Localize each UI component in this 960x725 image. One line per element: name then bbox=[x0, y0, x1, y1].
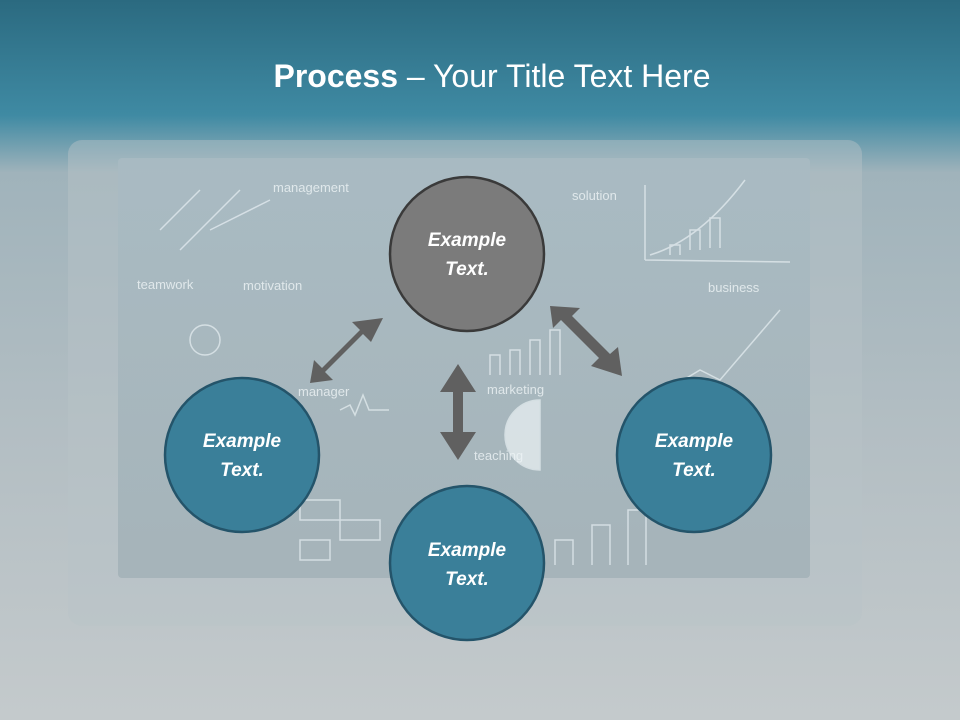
title: Process – Your Title Text Here bbox=[273, 58, 711, 94]
arrow: top to bottom bbox=[440, 364, 476, 460]
circle: left: Example bbox=[203, 431, 282, 452]
tablet: manager bbox=[298, 384, 350, 399]
arrow: top to left bbox=[310, 318, 383, 383]
arrow: top to right bbox=[550, 306, 622, 376]
tablet bbox=[68, 140, 862, 626]
circle: top bbox=[390, 177, 544, 331]
circle: left bbox=[165, 378, 319, 532]
circle: left: Text. bbox=[220, 460, 264, 481]
circle: top: Text. bbox=[445, 259, 489, 280]
tablet: teaching bbox=[474, 448, 523, 463]
tablet: management bbox=[273, 180, 349, 195]
tablet: motivation bbox=[243, 278, 302, 293]
circle: right: Text. bbox=[672, 460, 716, 481]
circle: bottom: Text. bbox=[445, 569, 489, 590]
tablet screen bbox=[118, 158, 810, 578]
circle: top: Example bbox=[428, 230, 507, 251]
circle: bottom bbox=[390, 486, 544, 640]
circle: bottom: Example bbox=[428, 540, 507, 561]
circle: right bbox=[617, 378, 771, 532]
tablet: teamwork bbox=[137, 277, 194, 292]
tablet: solution bbox=[572, 188, 617, 203]
circle: right: Example bbox=[655, 431, 734, 452]
tablet: marketing bbox=[487, 382, 544, 397]
tablet: business bbox=[708, 280, 760, 295]
